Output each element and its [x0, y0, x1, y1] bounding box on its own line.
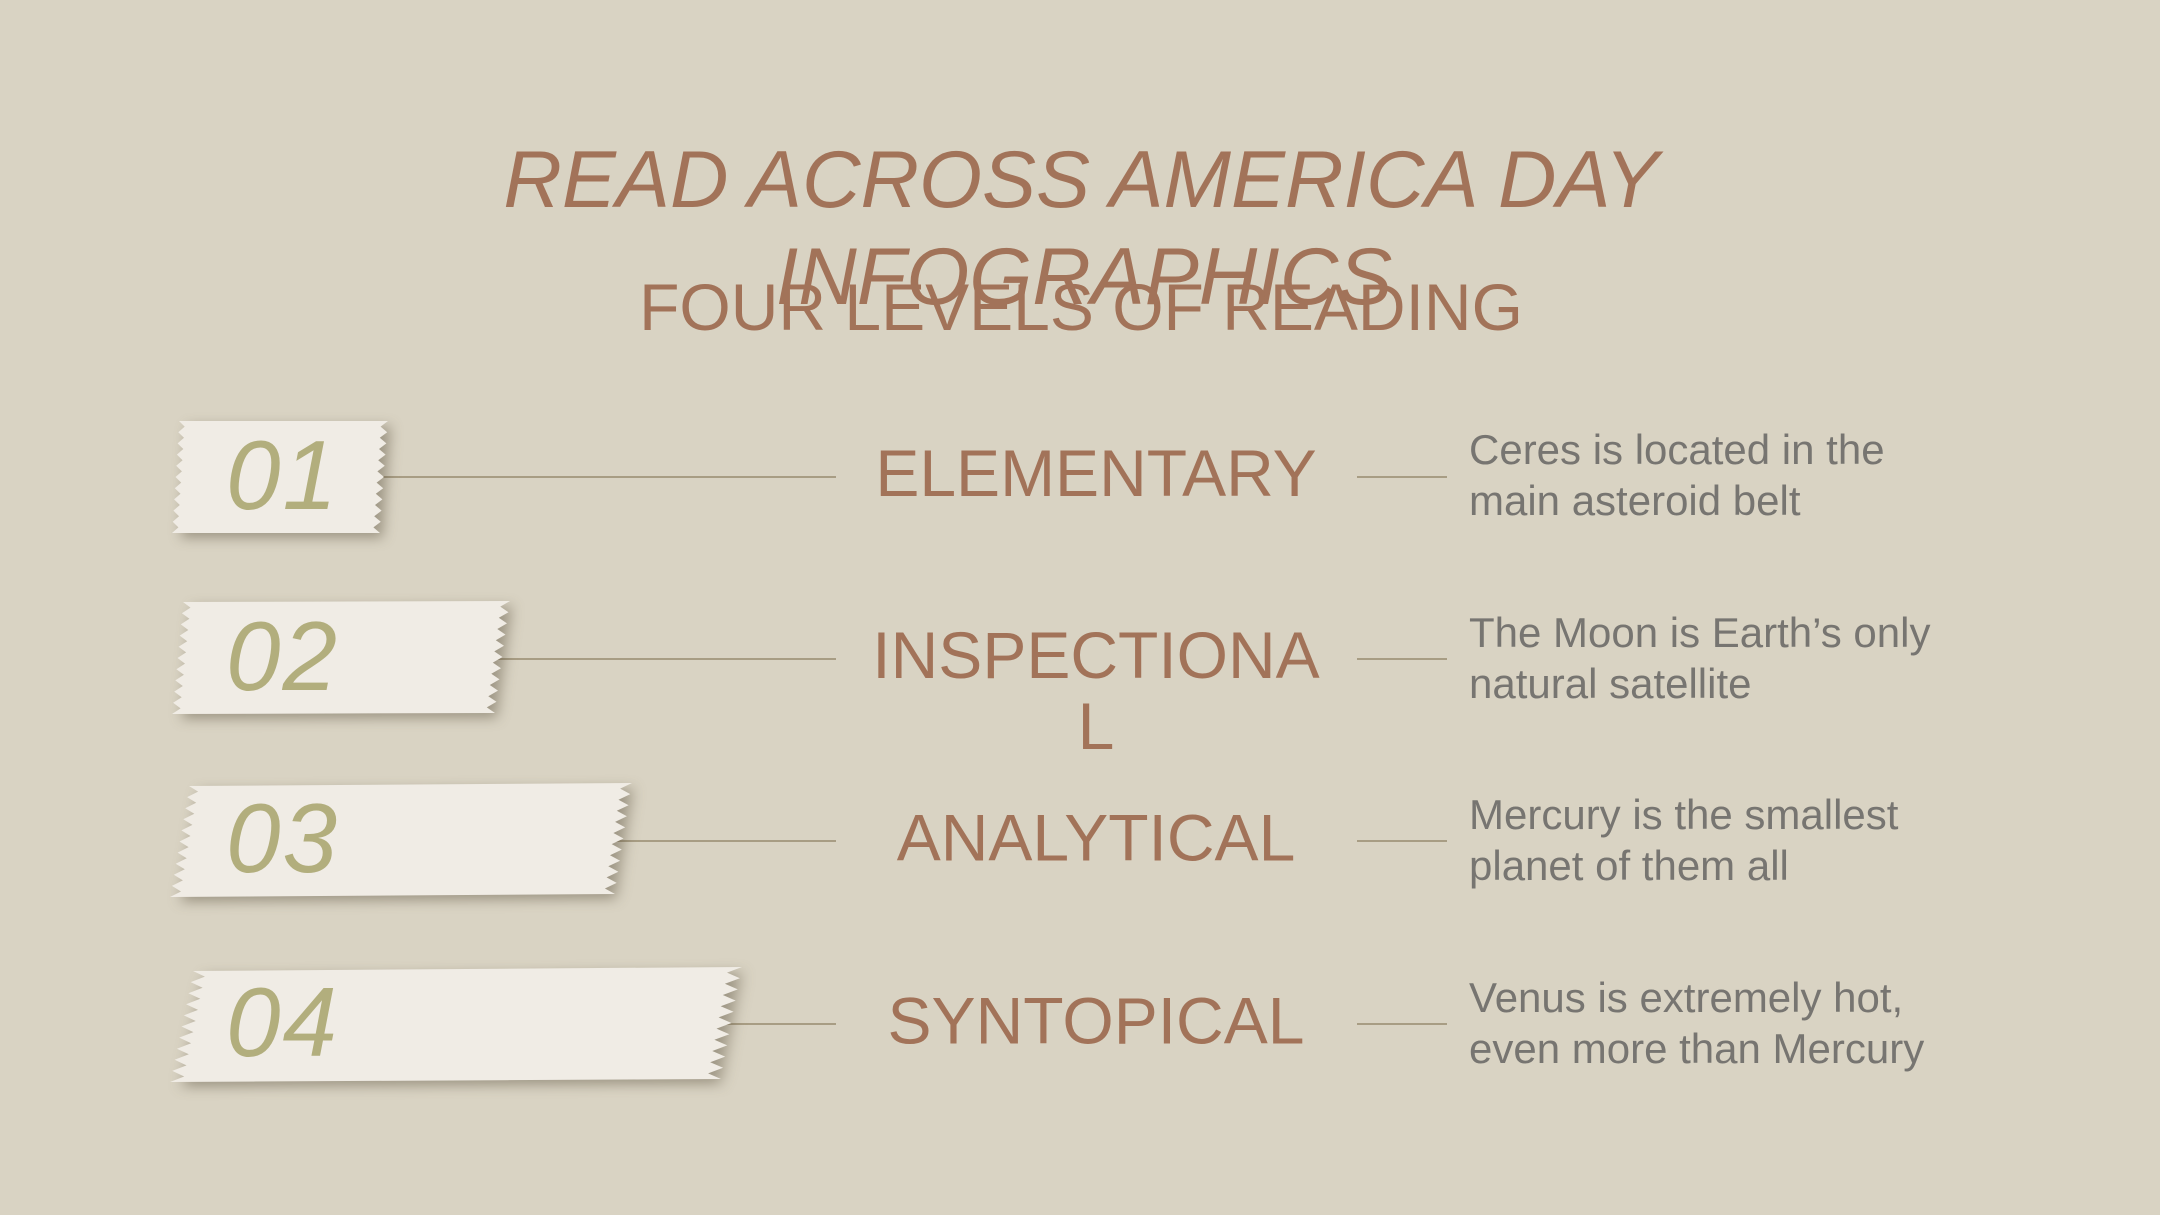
description: inspectional — [1469, 609, 1930, 707]
tape: 03 — [170, 783, 632, 897]
number: 04: 04 — [226, 967, 339, 1077]
connector line: analytical to description — [1357, 840, 1447, 842]
connector line: tape 03 to analytical — [606, 840, 836, 842]
subtitle: FOUR LEVELS OF READING — [639, 270, 1523, 344]
number: 01: 01 — [226, 420, 339, 530]
description: elementary: main asteroid belt — [1469, 477, 1801, 524]
title — [503, 135, 1664, 322]
connector line: inspectional to description — [1357, 658, 1447, 660]
tape: 04 — [170, 967, 742, 1082]
description: inspectional: The Moon is Earth’s only — [1469, 609, 1930, 656]
connector line: elementary to description — [1357, 476, 1447, 478]
title: INFOGRAPHICS — [776, 232, 1392, 322]
connector line: tape 02 to inspectional — [490, 658, 836, 660]
description: syntopical: Venus is extremely hot, — [1469, 974, 1903, 1021]
heading: inspectional: INSPECTIONA — [872, 618, 1320, 692]
description: elementary: Ceres is located in the — [1469, 426, 1885, 473]
description: syntopical — [1469, 974, 1924, 1072]
heading: elementary: ELEMENTARY — [875, 436, 1317, 510]
row: 03 analytical — [170, 783, 1899, 897]
tape: 02 — [172, 601, 510, 714]
number: 02: 02 — [226, 601, 339, 711]
description: analytical — [1469, 791, 1899, 889]
heading: inspectional — [872, 618, 1320, 763]
connector line: tape 01 to elementary — [376, 476, 836, 478]
description: inspectional: natural satellite — [1469, 660, 1752, 707]
connector line: tape 04 to syntopical — [716, 1023, 836, 1025]
number: 03: 03 — [226, 783, 339, 893]
row: 04 syntopical — [170, 967, 1924, 1082]
title: READ ACROSS AMERICA DAY — [503, 135, 1664, 225]
description: syntopical: even more than Mercury — [1469, 1025, 1924, 1072]
connector line: syntopical to description — [1357, 1023, 1447, 1025]
tape: 01 — [172, 421, 388, 533]
heading: syntopical: SYNTOPICAL — [888, 984, 1304, 1058]
description: analytical: Mercury is the smallest — [1469, 791, 1899, 838]
heading: inspectional: L — [1078, 689, 1114, 763]
description: elementary — [1469, 426, 1885, 524]
heading: analytical: ANALYTICAL — [897, 800, 1295, 874]
row: 02 inspectional — [172, 601, 1930, 763]
row: 01 elementary — [172, 420, 1885, 533]
description: analytical: planet of them all — [1469, 842, 1789, 889]
